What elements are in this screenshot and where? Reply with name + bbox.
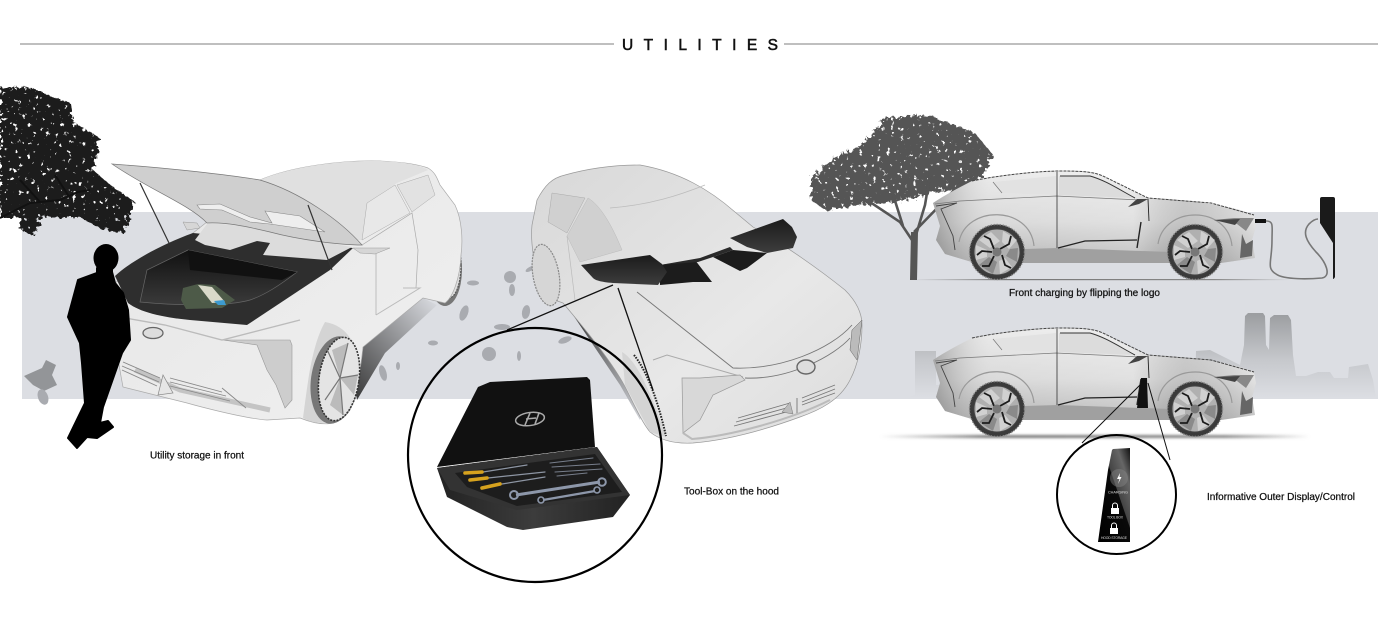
skyline silhouette — [905, 313, 1376, 398]
caption: utility storage: Utility storage in front — [150, 450, 244, 462]
shadow car 2 — [563, 300, 650, 420]
car 1: open front trunk, utility storage — [112, 161, 462, 427]
logo car 1 — [143, 328, 163, 338]
hood lines car 2 — [637, 292, 852, 378]
toolbox lid left — [581, 255, 667, 285]
bag in trunk — [181, 284, 235, 309]
trunk floor rim — [115, 233, 353, 325]
logo car 2 — [797, 360, 815, 374]
headlamp car 2 — [682, 375, 745, 433]
roof car 1 — [260, 161, 428, 240]
toolbox logo — [515, 411, 545, 427]
person silhouette — [68, 244, 130, 448]
wrenches — [510, 478, 606, 503]
grille car 1 — [122, 362, 246, 408]
charging icon — [1110, 469, 1128, 487]
callout circle: outer display — [1057, 383, 1176, 554]
car 3: side view front charging — [933, 171, 1256, 280]
lid struts — [140, 183, 332, 270]
caption: front charging: Front charging by flipping the logo — [1009, 288, 1160, 299]
rear wheel car 2 — [528, 242, 564, 308]
car 2: toolbox on the hood — [528, 165, 862, 443]
lid cut-out — [197, 204, 325, 232]
side window car 2 — [548, 193, 585, 233]
front wheel car 2 — [622, 352, 666, 437]
body car 2 — [532, 165, 862, 443]
front fascia — [223, 340, 292, 408]
car 4: side view outer display — [933, 328, 1256, 436]
charger post — [1320, 197, 1335, 279]
outer display door panel — [1137, 378, 1148, 408]
screwdrivers — [465, 458, 602, 488]
callout circle: toolbox detail — [408, 285, 662, 582]
charging plug — [1255, 219, 1266, 223]
front wheel car 1 — [303, 322, 365, 427]
ground shadow under lower car — [880, 435, 1310, 438]
grille car 2 — [734, 385, 835, 426]
lock icon hood storage — [1110, 523, 1118, 534]
caption: outer display: Informative Outer Display/Control — [1207, 492, 1355, 503]
lower front contour car 2 — [683, 400, 830, 439]
reflected glass area — [195, 224, 352, 260]
background band — [22, 212, 1378, 399]
tree: grey behind side car — [811, 115, 993, 280]
display panel — [1098, 448, 1130, 542]
charging cable — [1266, 219, 1327, 279]
tray top — [437, 447, 630, 510]
toolbox lid right — [730, 219, 797, 253]
caption: toolbox: Tool-Box on the hood — [684, 486, 779, 498]
tree: large black at left — [0, 87, 135, 235]
body car 1 — [114, 161, 462, 424]
shadow under car 1 — [350, 298, 437, 400]
ground line under upper car — [910, 279, 1290, 280]
lock icon tool box — [1111, 503, 1119, 514]
storage well — [140, 250, 297, 305]
toolbox tray side — [437, 447, 630, 530]
hood storage label: HOOD STORAGE — [1101, 536, 1128, 540]
leaves scattered — [24, 265, 573, 406]
toolbox cavities — [660, 250, 767, 285]
mirrors — [183, 222, 390, 254]
tool box label: TOOL BOX — [1107, 516, 1124, 520]
title: UTILITIES heading with rules: UTILITIES — [622, 37, 778, 54]
windows car 1 — [362, 185, 410, 240]
charging label: CHARGING — [1108, 490, 1128, 494]
rear wheel car 1 — [428, 232, 462, 306]
toolbox lid open — [437, 377, 595, 467]
hood lid raised — [112, 164, 362, 245]
